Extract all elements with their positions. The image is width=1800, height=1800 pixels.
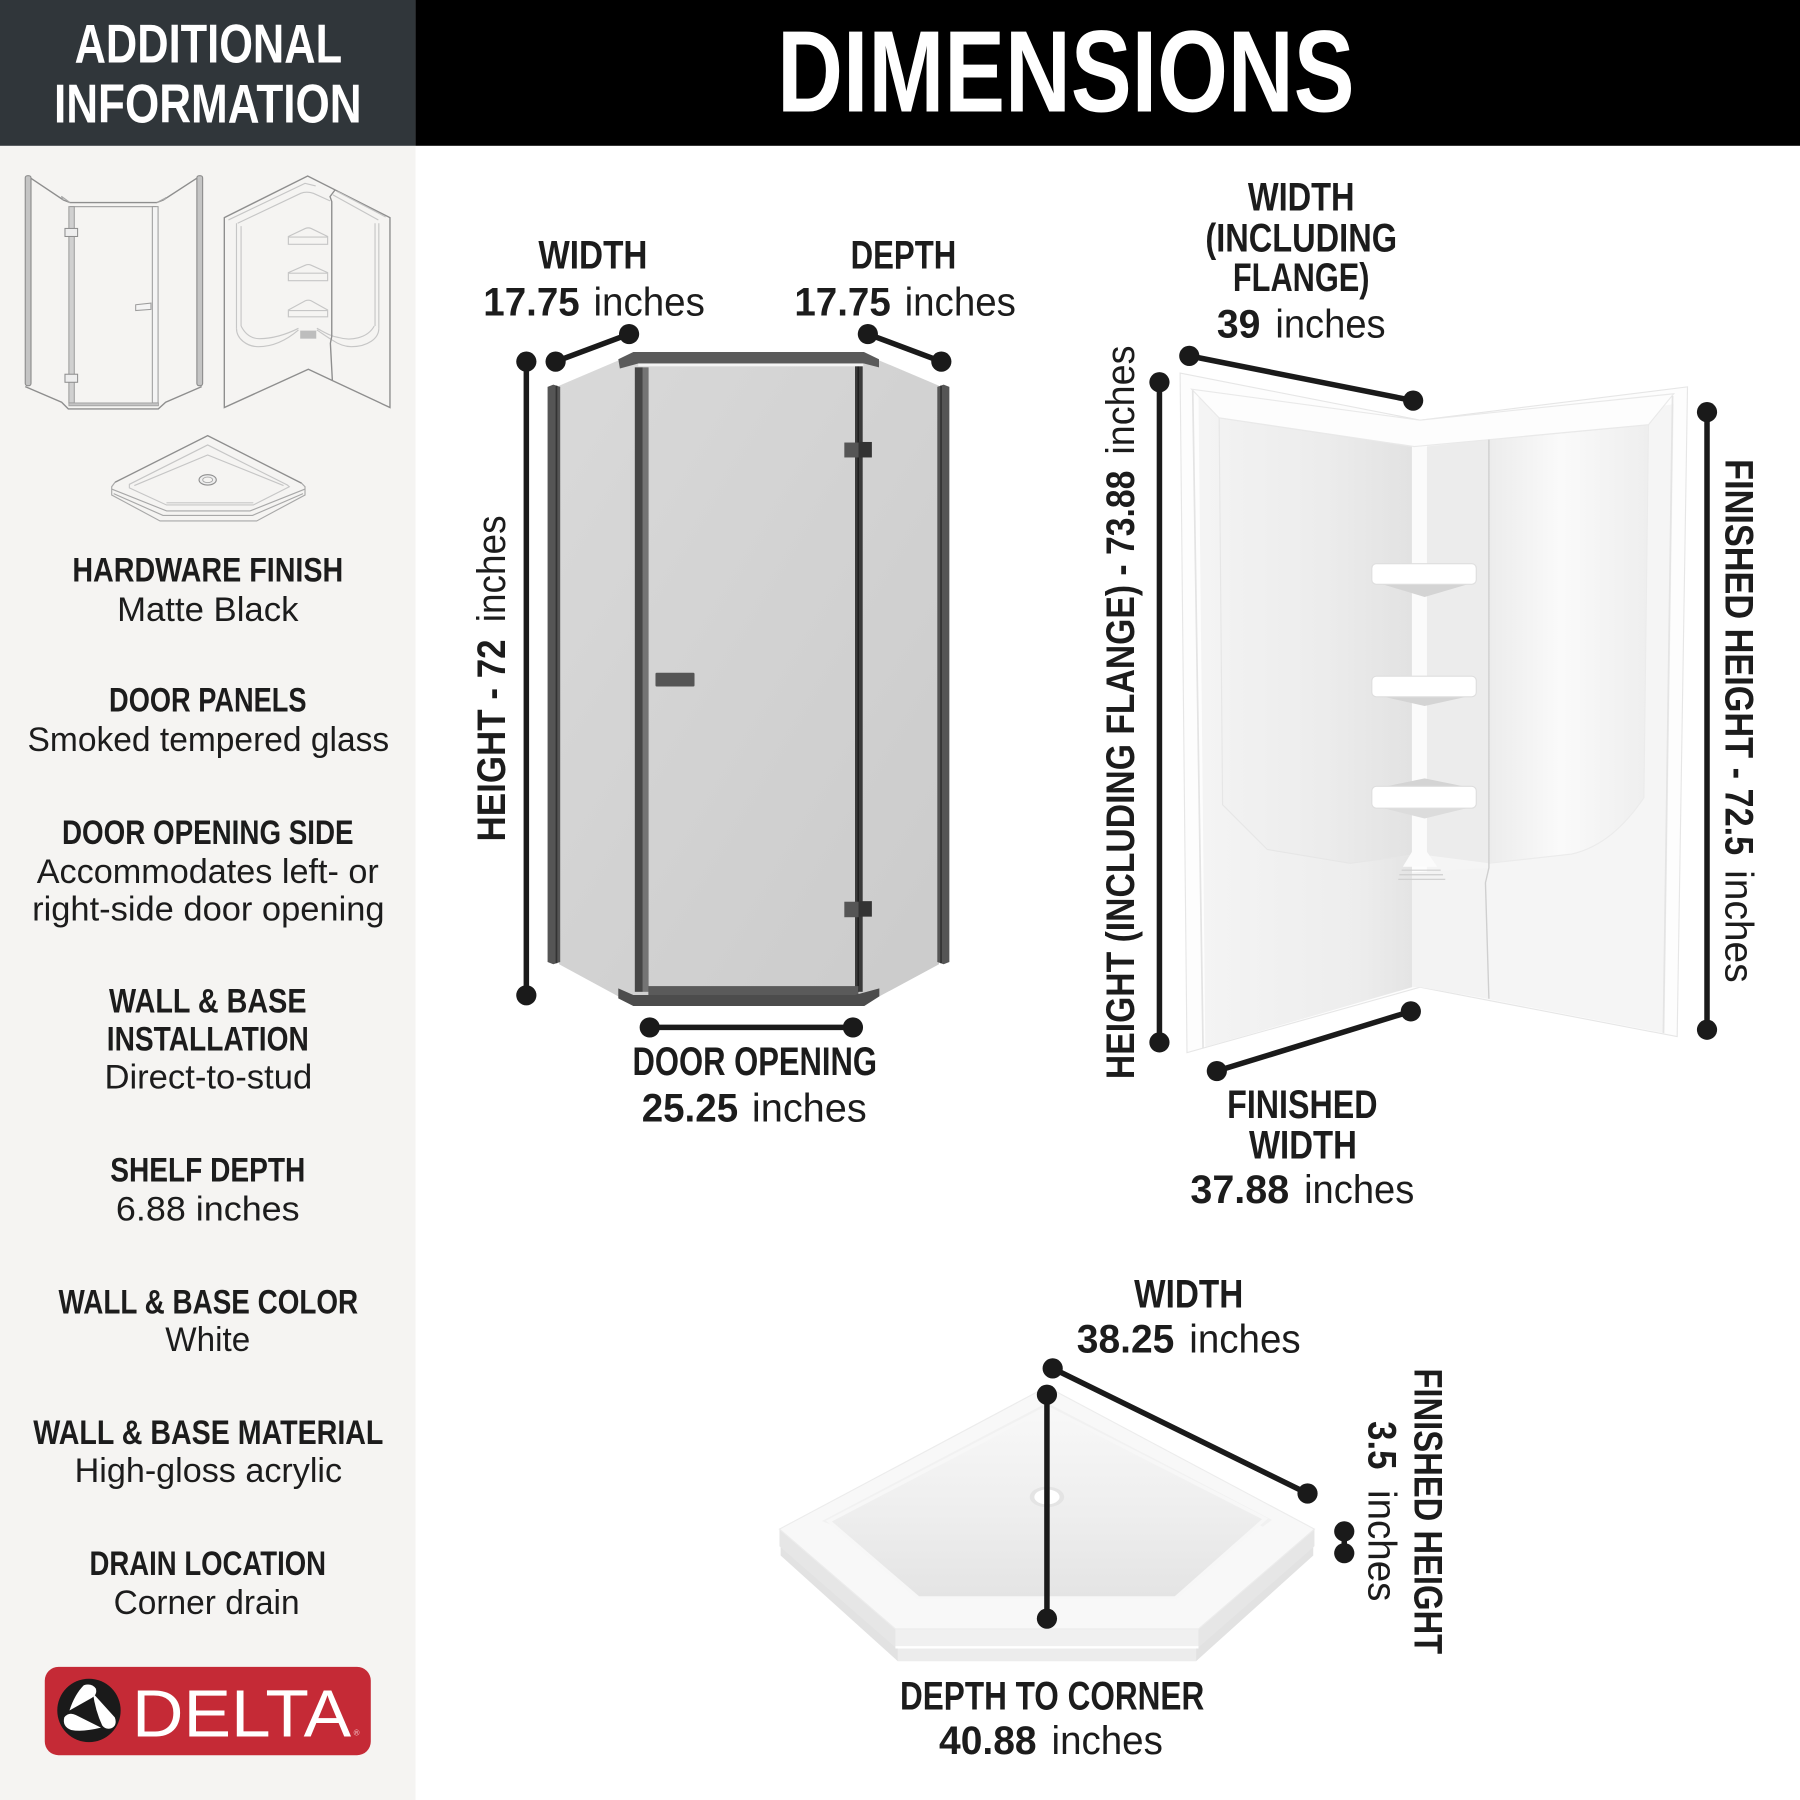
dimension: wall height including flange (1098, 346, 1170, 1079)
lower corner (1412, 868, 1489, 999)
icon: wall panels line drawing (224, 176, 390, 408)
top moulding (1192, 389, 1674, 447)
dimension: finished height: FINISHED HEIGHT - 72.5 (1716, 459, 1761, 855)
left wall (1198, 394, 1412, 1047)
dimension: wall width including flange: FLANGE) (1233, 255, 1370, 300)
dimension: finished height: inches (1716, 870, 1761, 983)
left wall recess (1219, 418, 1412, 863)
shelf 2 (1372, 676, 1476, 706)
dimension: base width (1043, 1272, 1318, 1504)
header: additional information: INFORMATION (54, 72, 362, 134)
dimension: wall width including flange (1179, 175, 1423, 411)
dimension: door width: inches (593, 280, 705, 325)
flange lip (1193, 390, 1673, 1048)
dimension: door depth (794, 233, 1016, 372)
dimension: finished width: WIDTH (1249, 1122, 1357, 1167)
lower side (781, 1546, 1313, 1661)
dimension: wall width including flange: 39 (1217, 301, 1260, 346)
right wall (1427, 404, 1674, 1033)
spec: wall and base installation: INSTALLATION (107, 1020, 309, 1058)
dimension: door width: 17.75 (483, 280, 580, 325)
icon: shower door line drawing (25, 176, 203, 409)
dimension: door opening: 25.25 (642, 1086, 738, 1131)
spec: drain location: DRAIN LOCATION (90, 1545, 326, 1583)
spec: door opening side: DOOR OPENING SIDE (62, 814, 354, 852)
dimension: base depth to corner: 40.88 (939, 1718, 1037, 1763)
spec: drain location: Corner drain (114, 1584, 300, 1622)
spec: drain location (90, 1545, 326, 1622)
dimension: door height: HEIGHT - 72 (469, 639, 514, 841)
dimension: finished width: FINISHED (1227, 1082, 1378, 1127)
door right rail (855, 365, 863, 992)
inner pan (829, 1407, 1265, 1598)
spec: door panels: DOOR PANELS (109, 682, 307, 720)
dimension: base width: inches (1189, 1316, 1301, 1361)
dimension: finished width: 37.88 (1190, 1167, 1289, 1212)
dimension: wall width including flange: (INCLUDING (1205, 215, 1397, 260)
spec: shelf depth: SHELF DEPTH (110, 1151, 305, 1189)
dimension: base finished height: inches (1359, 1490, 1404, 1601)
bottom hinge (844, 901, 872, 917)
bottom bar (618, 986, 879, 1006)
spec: wall and base material: High-gloss acrylic (75, 1452, 342, 1490)
spec: wall and base color: White (165, 1321, 250, 1359)
shower base product image (779, 1387, 1314, 1661)
spec: door panels: Smoked tempered glass (28, 721, 389, 759)
dimension: wall height including flange: HEIGHT (INCLUDING FLANGE) - 73.88 (1098, 471, 1143, 1079)
spec: hardware finish: HARDWARE FINISH (72, 551, 343, 589)
header: additional information (0, 0, 416, 146)
drain (1030, 1487, 1064, 1507)
right fixed post (937, 385, 949, 964)
top bar (618, 352, 879, 368)
top hinge (844, 442, 872, 457)
logo: Delta (45, 1667, 371, 1755)
dimension: door depth: inches (905, 280, 1016, 325)
dimension: door opening: inches (752, 1086, 867, 1131)
spec: wall and base color: WALL & BASE COLOR (59, 1283, 358, 1321)
corner panel (1427, 440, 1489, 863)
rim bevel (822, 1403, 1272, 1527)
dimension: base width: 38.25 (1077, 1316, 1174, 1361)
dimension: door depth: 17.75 (794, 280, 891, 325)
dimension: door opening (633, 1017, 877, 1131)
upper side (779, 1529, 1314, 1647)
shower door product image (548, 352, 949, 1006)
dimension: base finished height: 3.5 (1359, 1421, 1404, 1469)
dimension: door width (483, 233, 705, 372)
spec: shelf depth: 6.88 inches (116, 1190, 300, 1228)
dimension: base depth to corner (900, 1385, 1204, 1763)
corner column (1403, 447, 1437, 867)
wall panels product image (1180, 373, 1688, 1053)
spec: door panels (28, 682, 389, 759)
spec: shelf depth (110, 1151, 305, 1228)
spec: wall and base installation (104, 983, 312, 1096)
header: dimensions: DIMENSIONS (777, 6, 1355, 136)
header: dimensions (416, 0, 1800, 146)
dimension: door depth: DEPTH (851, 233, 956, 278)
door handle (655, 673, 695, 686)
dimension: wall width including flange: WIDTH (1248, 175, 1355, 220)
spec: wall and base material (33, 1414, 383, 1490)
spec: wall and base installation: Direct-to-stud (104, 1058, 312, 1096)
dimension: base finished height: FINISHED HEIGHT (1405, 1368, 1450, 1655)
logo: Delta: ® (354, 1729, 360, 1738)
dimension: finished width (1190, 1001, 1421, 1212)
outer flange (1180, 373, 1688, 1053)
door left rail (635, 367, 649, 992)
shelf 3 (1372, 778, 1476, 818)
spec: door opening side: Accommodates left- or (37, 853, 379, 891)
dimension: wall width including flange: inches (1275, 301, 1386, 346)
spec: wall and base material: WALL & BASE MATERIAL (33, 1414, 383, 1452)
top rim (779, 1387, 1314, 1629)
spec: hardware finish (72, 551, 343, 629)
right wall recess (1489, 425, 1648, 863)
dimension: door width: WIDTH (538, 233, 647, 278)
spec: door opening side: right-side door opening (32, 891, 385, 929)
front faces (895, 1629, 1198, 1647)
dimension: base finished height (1334, 1368, 1450, 1655)
dimension: door opening: DOOR OPENING (633, 1039, 877, 1084)
spec: door opening side (32, 814, 385, 929)
left fixed post (548, 385, 560, 964)
header: additional information: ADDITIONAL (75, 13, 342, 75)
dimension: base width: WIDTH (1134, 1272, 1243, 1317)
sidebar background (0, 146, 416, 1800)
dimension: door height (469, 352, 536, 1005)
seam (1485, 440, 1489, 999)
spec: wall and base color (59, 1283, 358, 1359)
spec: wall and base installation: WALL & BASE (109, 983, 307, 1021)
dimension: base depth to corner: DEPTH TO CORNER (900, 1673, 1204, 1718)
icon: shower base line drawing (112, 436, 305, 521)
shelf 1 (1372, 564, 1476, 597)
dimension: base depth to corner: inches (1052, 1718, 1163, 1763)
dimension: finished width: inches (1304, 1167, 1414, 1212)
dimension: door height: inches (469, 515, 514, 622)
spec: hardware finish: Matte Black (117, 591, 299, 629)
logo: Delta: DELTA (132, 1677, 352, 1751)
dimension: finished height (1697, 402, 1761, 1040)
drain vents (1398, 870, 1445, 879)
dimension: wall height including flange: inches (1098, 346, 1143, 455)
